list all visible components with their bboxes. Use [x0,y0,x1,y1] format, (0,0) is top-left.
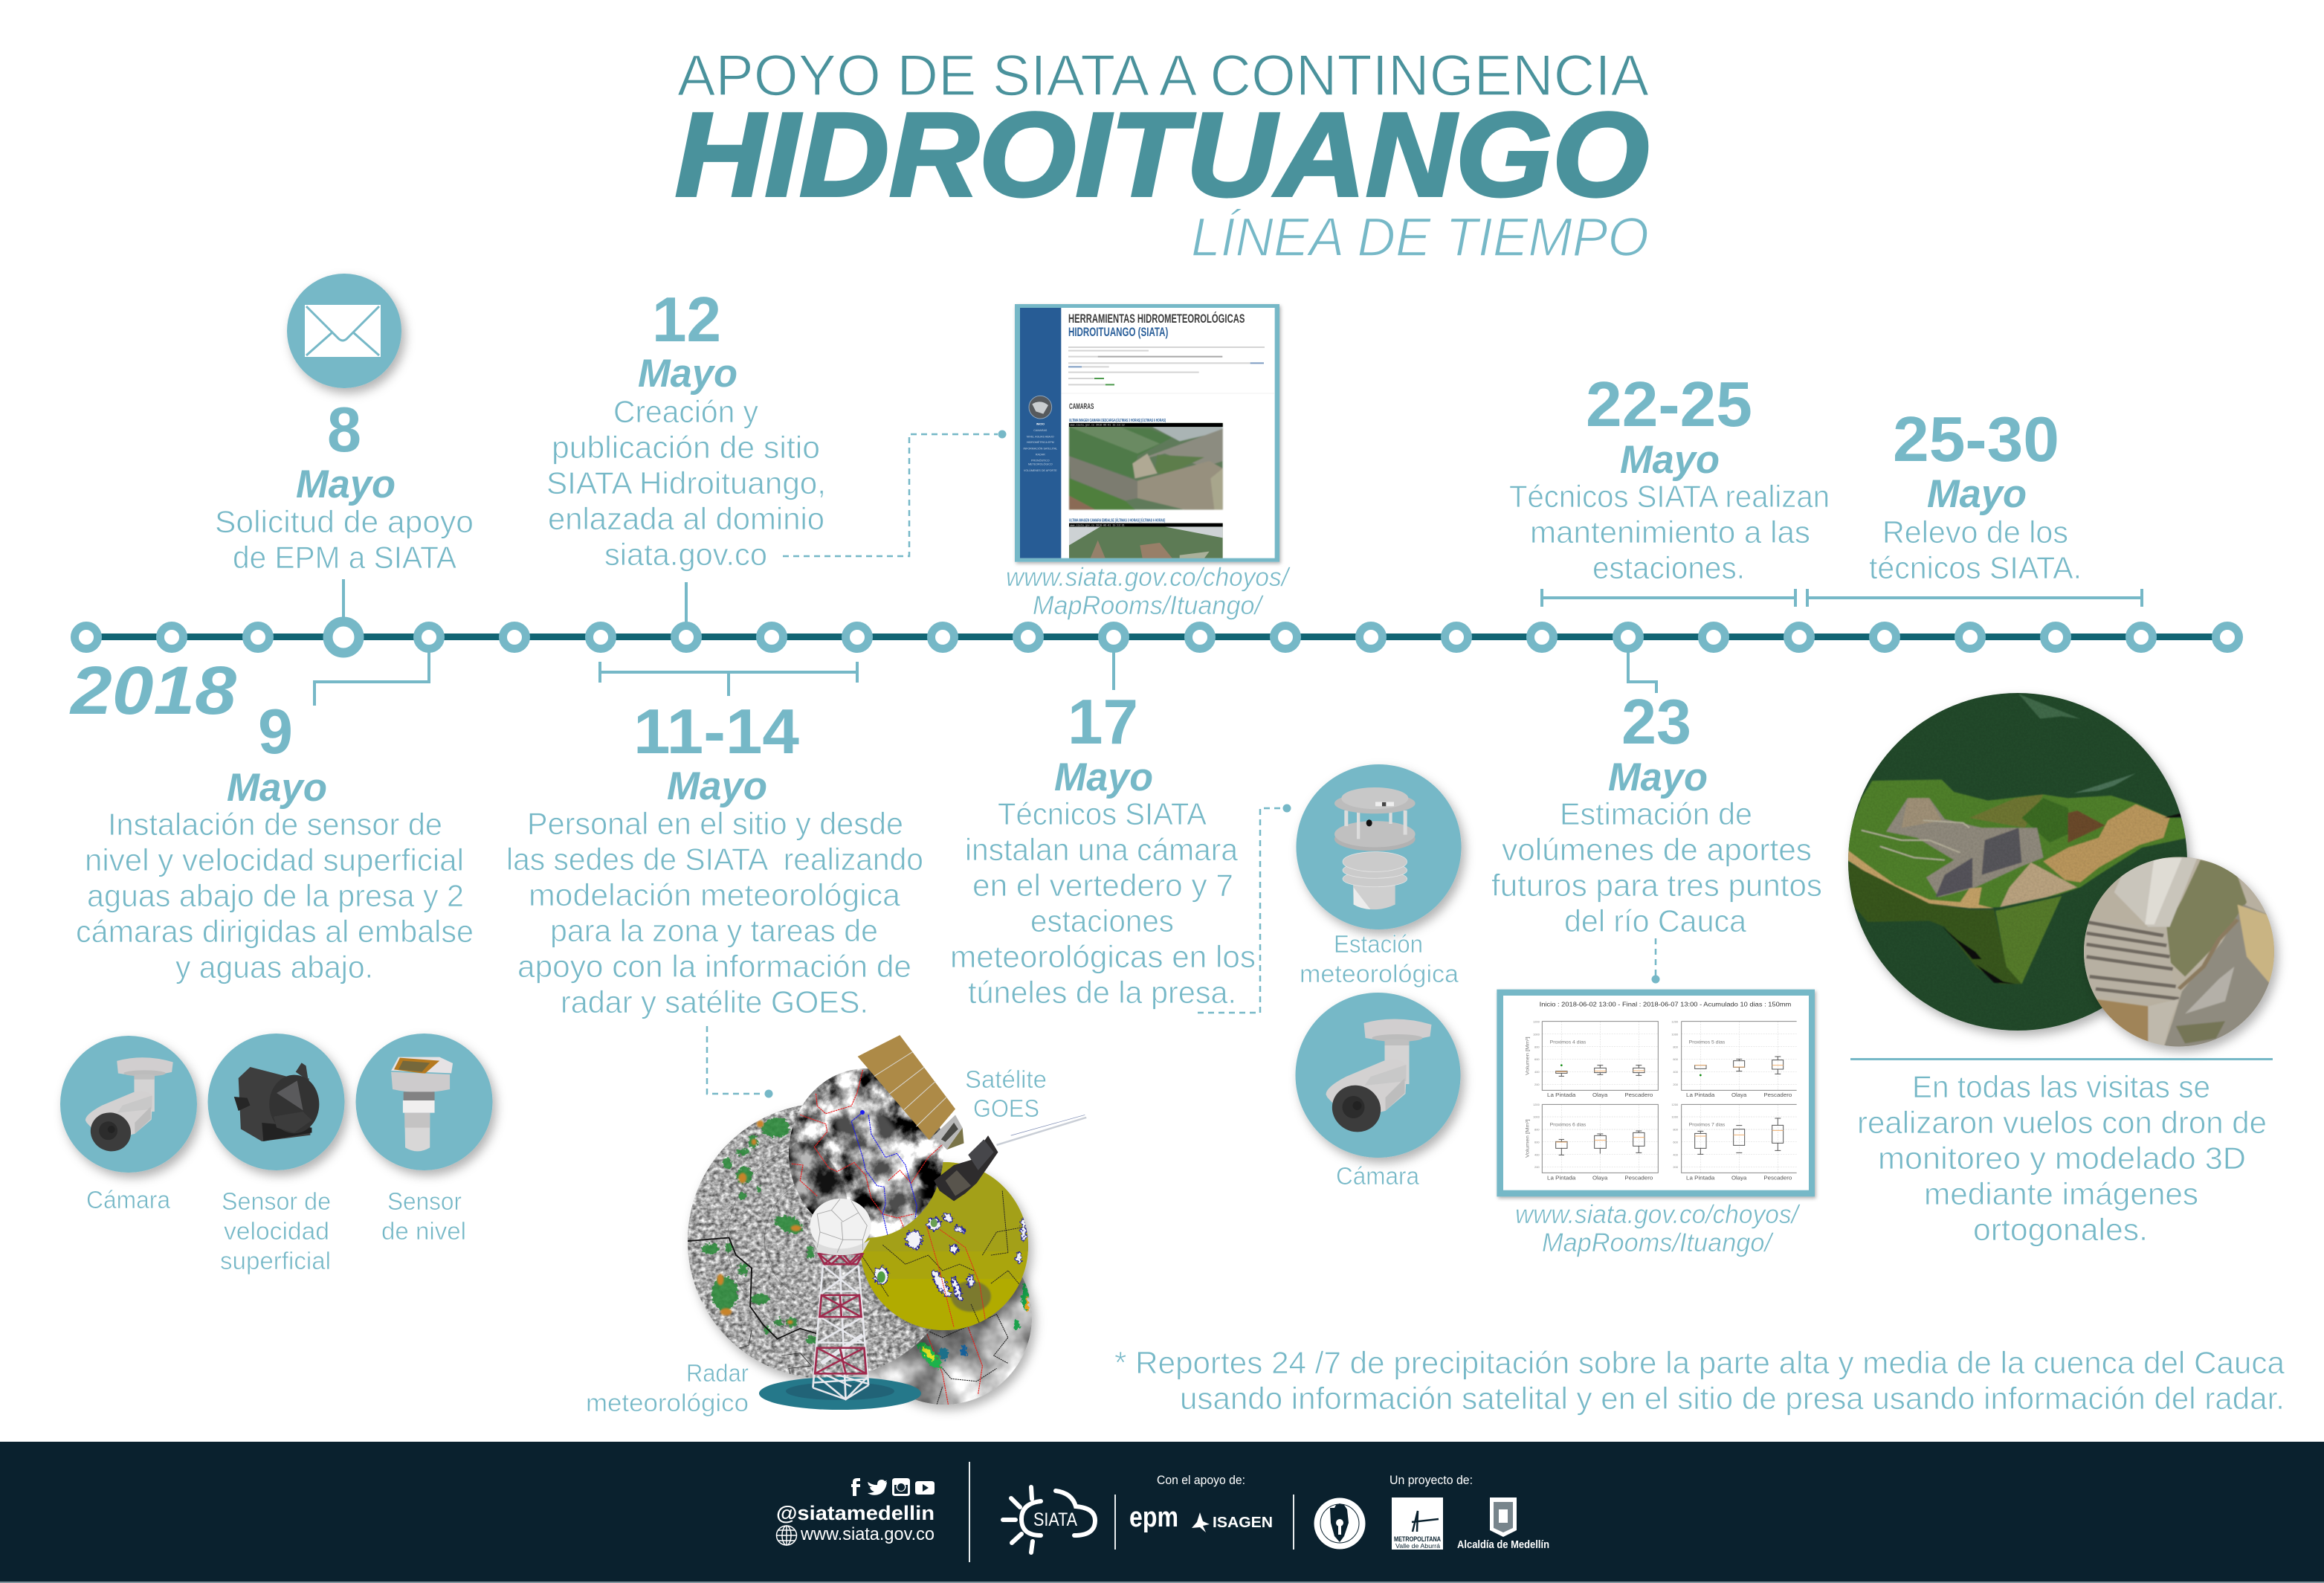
box plot chart: 600 [1673,1140,1679,1144]
label: level sensor [381,1187,466,1245]
box plot chart: 1200 [1533,1019,1540,1023]
box plot chart: La Pintada [1686,1093,1714,1098]
month: Mayo [1054,755,1153,799]
event: 22-25 mayo [1509,370,1830,607]
drone flights note: En todas las visitas se [1912,1069,2210,1104]
description [76,807,474,984]
box plot chart: La Pintada [1547,1176,1575,1181]
description: instalan una cámara [965,832,1239,867]
description: estaciones [1030,903,1174,938]
box plot chart: Proximos 6 dias [1550,1123,1586,1127]
connector [1112,648,1115,690]
description: túneles de la presa. [968,975,1236,1010]
label: weather station: Estación [1334,930,1423,958]
website screenshot: HIDROMÉTRICA EPM [1027,440,1054,444]
description: Técnicos SIATA [998,796,1207,831]
website: www.siata.gov.co [800,1524,935,1544]
label: velocity sensor [220,1187,331,1274]
box plot chart: 1200 [1533,1103,1540,1106]
footnote: usando información satelital y en el sitio de presa usando información del radar. [1180,1381,2285,1416]
description [1509,479,1830,585]
website screenshot [1015,304,1279,562]
website screenshot: ULTIMA IMAGEN CAMARA EMBALSE [ÚLTIMAS 3 HORAS] [ÚLTIMAS 6 HORAS] [1069,518,1165,523]
box plot chart: 800 [1673,1128,1679,1132]
box plot chart: 200 [1534,1083,1540,1086]
box plot chart: Olaya [1592,1093,1607,1098]
dashed leader to radar [707,1026,773,1097]
website screenshot: INFORMACIÓN SATELITAL [1023,446,1057,450]
lower infrared disc [870,1270,1042,1416]
event: 11-14 mayo [506,662,923,1097]
logo: Isagen [1192,1512,1273,1532]
month: Mayo [1608,755,1708,799]
dashed leader to station [1198,805,1291,1013]
box plot chart: Olaya [1731,1176,1746,1181]
description: aguas abajo de la presa y 2 [87,878,464,913]
description: estaciones. [1592,550,1745,585]
drone photo: large [1846,693,2188,1031]
label: satellite [965,1065,1047,1122]
handle: @siatamedellin [776,1502,935,1524]
box plot chart: 400 [1673,1070,1679,1074]
description: de EPM a SIATA [233,540,456,575]
dashed leader to website [783,430,1007,556]
description: las sedes de SIATA realizando [506,842,923,877]
description: mantenimiento a las [1530,515,1810,549]
title [675,42,1649,268]
box plot chart: 1000 [1671,1032,1679,1036]
event: 25-30 mayo [1807,404,2142,607]
description: futuros para tres puntos [1491,868,1822,903]
connector [1628,648,1656,693]
website screenshot: www.siata.gov.co 2018-06-01 15:13:31 [1070,523,1125,527]
logo: SIATA: SIATA [1033,1509,1077,1530]
icon: camera [60,1036,197,1173]
radar base [759,1377,921,1410]
date: 25-30 [1893,404,2059,475]
icon: camera 2 [1295,993,1460,1158]
label: radar: Radar [686,1359,749,1387]
month: Mayo [667,764,767,808]
drone photo: small [2083,857,2274,1048]
olive infrared disc [860,1162,1028,1331]
logo: Isagen: ISAGEN [1213,1515,1273,1531]
description: meteorológicas en los [950,939,1256,974]
description: cámaras dirigidas al embalse [76,914,474,949]
description: nivel y velocidad superficial [85,842,464,877]
description: Técnicos SIATA realizan [1509,479,1830,514]
label: satellite: GOES [973,1094,1039,1122]
description [506,806,923,1019]
date: 23 [1621,687,1691,758]
box plot chart: 600 [1534,1140,1540,1144]
chart title: Inicio : 2018-06-02 13:00 - Final : 2018-06-07 13:00 - Acumulado 10 dias : 150mm [1540,1001,1791,1008]
description: del río Cauca [1564,903,1747,938]
website screenshot: CAMARAS [1033,429,1048,432]
description: siata.gov.co [604,537,767,572]
description: Relevo de los [1882,515,2068,549]
label: camera: Cámara [86,1186,171,1213]
label: level sensor: de nivel [381,1217,466,1245]
drone flights note: mediante imágenes [1924,1176,2198,1211]
description: Creación y [613,394,758,429]
website screenshot: VOLÚMENES DE APORTE [1024,468,1057,472]
box plot chart: Pescadero [1624,1093,1653,1098]
box plot chart: 200 [1534,1165,1540,1169]
box plot chart: Volumen [Mm³] [1526,1119,1531,1158]
label: velocity sensor: velocidad [224,1217,329,1245]
label: camera 2: Cámara [1336,1162,1420,1190]
box plot chart: La Pintada [1547,1093,1575,1098]
website screenshot: ULTIMA IMAGEN CAMARA DESCARGA [ÚLTIMAS 3 HORAS] [ÚLTIMAS 6 HORAS] [1069,418,1166,423]
box plot chart: Olaya [1592,1176,1607,1181]
description: para la zona y tareas de [550,913,878,948]
icon: weather station [1297,764,1462,929]
website url: MapRooms/Ituango/ [1033,591,1264,620]
description: modelación meteorológica [529,877,901,912]
box plot chart: Olaya [1731,1093,1746,1098]
month: Mayo [638,352,737,396]
box plot chart: Proximos 5 dias [1689,1040,1725,1045]
satellite cloud disc [776,1068,944,1239]
logo: Área Metropolitana [1392,1497,1443,1550]
footnote [1114,1345,2285,1416]
connector [314,648,429,706]
box plot chart: 800 [1534,1045,1540,1048]
box plot chart: 1200 [1671,1019,1679,1023]
box plot chart: 1000 [1533,1115,1540,1119]
connector [685,582,688,626]
logo: Área Metropolitana: Valle de Aburrá [1395,1543,1441,1550]
satellite [858,1035,1086,1201]
box plot chart: 1000 [1671,1115,1679,1119]
bracket [1807,589,2142,607]
box plot chart: 800 [1673,1045,1679,1048]
chart url [1515,1200,1801,1257]
footnote: * Reportes 24 /7 de precipitación sobre la parte alta y media de la cuenca del Cauca [1114,1345,2285,1380]
logo: SIATA [1003,1487,1095,1553]
description: Personal en el sitio y desde [527,806,903,841]
box plot chart: Pescadero [1763,1176,1792,1181]
label: level sensor: Sensor [387,1187,462,1215]
description: volúmenes de aportes [1502,832,1812,867]
description [1869,515,2082,585]
website screenshot: HIDROITUANGO (SIATA) [1068,325,1168,339]
drone flights note [1857,1069,2267,1247]
date: 9 [258,697,293,767]
box plot chart: Volumen [Mm³] [1526,1036,1531,1075]
event: 23 mayo [1491,648,1822,983]
box plot chart: 600 [1534,1057,1540,1061]
year 2018: 2018 [69,653,237,729]
description [215,504,474,575]
website screenshot: HERRAMIENTAS HIDROMETEOROLÓGICAS [1068,312,1245,326]
logo: epm: epm [1129,1502,1178,1533]
footer [0,1442,2324,1583]
label: radar [586,1359,749,1416]
box plot chart: 1200 [1671,1103,1679,1106]
event: 8 mayo [215,274,474,621]
icon: level sensor [355,1034,492,1170]
website screenshot: RADAR [1036,453,1045,456]
box plot chart [1497,990,1815,1196]
date: 17 [1068,687,1138,758]
date: 8 [327,395,361,465]
chart url: www.siata.gov.co/choyos/ [1515,1200,1801,1229]
description: y aguas abajo. [175,950,373,984]
chart url: MapRooms/Ituango/ [1542,1228,1774,1257]
icon: velocity sensor [208,1034,345,1170]
timeline axis [74,622,2239,653]
box plot chart: Pescadero [1624,1176,1653,1181]
connector [342,579,345,621]
website screenshot: INICIO [1036,423,1045,426]
radar relief disc [688,1103,963,1379]
description: publicación de sitio [552,430,820,465]
website screenshot: METEOROLÓGICO [1028,462,1053,466]
label: support: Con el apoyo de: [1157,1473,1245,1487]
month: Mayo [227,766,327,810]
label: weather station [1300,930,1459,987]
radar tower [810,1199,871,1399]
logo: Alcaldía de Medellín: Alcaldía de Medellín [1457,1538,1549,1551]
description: SIATA Hidroituango, [546,465,826,500]
label: velocity sensor: superficial [220,1247,331,1274]
label: weather station: meteorológica [1300,960,1459,987]
description: Solicitud de apoyo [215,504,474,539]
event: 17 mayo [950,648,1291,1013]
label: velocity sensor: Sensor de [222,1187,331,1215]
description: Estimación de [1560,796,1752,831]
divider [1850,1058,2273,1060]
heading: apoyo de SIATA: APOYO DE SIATA A CONTINGENCIA [677,42,1649,108]
logo: Medellín seal [1314,1497,1365,1550]
box plot chart: Pescadero [1763,1093,1792,1098]
website screenshot: PRONÓSTICO [1031,458,1050,462]
month: Mayo [1620,438,1720,482]
box plot chart: Proximos 7 dias [1689,1123,1725,1127]
box plot chart: 200 [1673,1165,1679,1169]
dashed leader to chart [1652,938,1659,983]
drone flights note: monitoreo y modelado 3D [1878,1141,2246,1176]
event: 9 mayo [76,648,474,984]
website screenshot: www.siata.gov.co 2018-06-01 15:13:12 [1070,424,1125,428]
label: radar: meteorológico [586,1389,749,1416]
month: Mayo [1927,472,2027,516]
bracket [600,662,857,696]
website url: www.siata.gov.co/choyos/ [1006,563,1291,592]
date: 11-14 [633,697,799,767]
drone flights note: realizaron vuelos con dron de [1857,1105,2267,1140]
box plot chart: Proximos 4 dias [1550,1040,1586,1045]
social icons [851,1478,935,1496]
icon: globe [776,1526,797,1545]
logo: Alcaldía de Medellín [1457,1497,1549,1551]
logo: Área Metropolitana: METROPOLITANA [1394,1535,1441,1543]
heading: línea de tiempo: LÍNEA DE TIEMPO [1191,207,1649,268]
label: project: Un proyecto de: [1389,1473,1473,1487]
radar and satellite montage [688,1035,1086,1410]
description: técnicos SIATA. [1869,550,2082,585]
box plot chart: La Pintada [1686,1176,1714,1181]
heading: Hidroituango: HIDROITUANGO [675,88,1649,221]
description: Instalación de sensor de [108,807,442,842]
box plot chart: 400 [1534,1070,1540,1074]
description: enlazada al dominio [548,501,824,536]
description [1491,796,1822,938]
description: apoyo con la información de [517,949,911,984]
date: 22-25 [1586,370,1752,440]
box plot chart: 1000 [1533,1032,1540,1036]
box plot chart: 800 [1534,1128,1540,1132]
box plot chart: 600 [1673,1057,1679,1061]
date: 12 [652,285,721,355]
icon: envelope [287,274,401,388]
month: Mayo [296,462,396,506]
description: radar y satélite GOES. [561,984,868,1019]
website url [1006,563,1291,620]
description: en el vertedero y 7 [972,868,1233,903]
description [950,796,1256,1010]
bracket [1542,589,1795,607]
label: satellite: Satélite [965,1065,1047,1093]
event: 12 mayo [546,285,1007,626]
box plot chart: 400 [1673,1152,1679,1156]
website screenshot: CAMARAS [1069,402,1094,411]
description [546,394,826,572]
box plot chart: 200 [1673,1083,1679,1086]
drone flights note: ortogonales. [1973,1212,2148,1247]
website screenshot: NIVEL AGUAS ABAJO [1027,436,1054,439]
box plot chart: 400 [1534,1152,1540,1156]
